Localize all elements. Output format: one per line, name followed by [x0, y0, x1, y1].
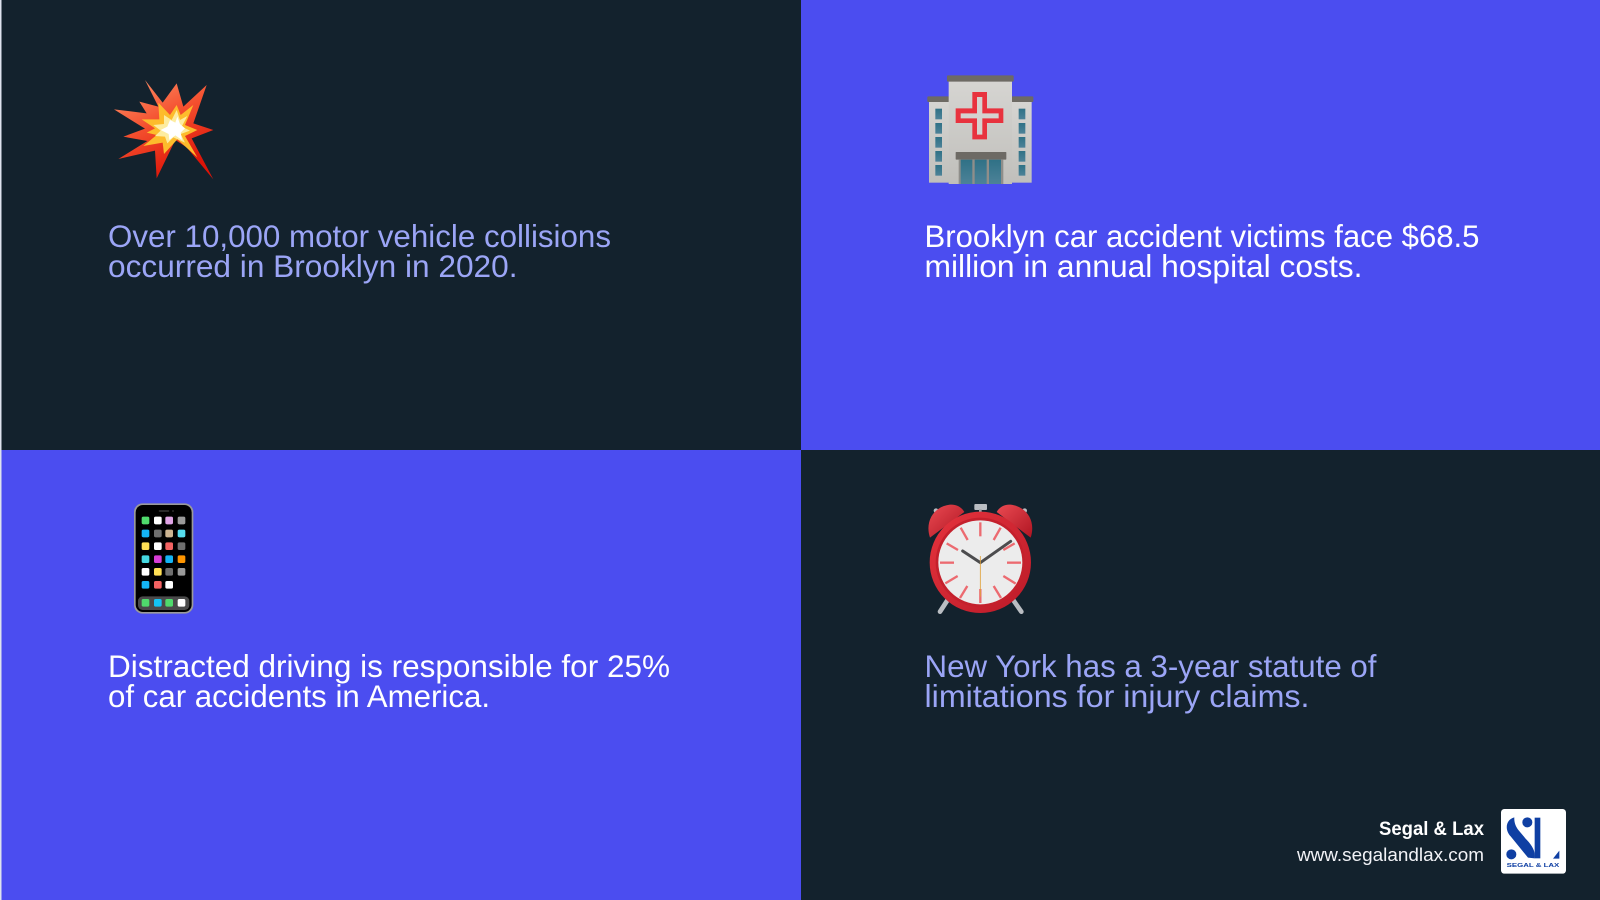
fact text: hospital costs: million in annual hospital costs.: [924, 248, 1362, 284]
fact text: distracted driving: Distracted driving is responsible for 25%: [108, 648, 670, 684]
fact text: statute of limitations: [924, 648, 1377, 714]
fact text: distracted driving: of car accidents in America.: [108, 678, 490, 714]
icon: smartphone: [134, 503, 193, 614]
brand name and website: Segal & Lax: [1379, 819, 1484, 840]
panel: hospital costs: [801, 0, 1600, 450]
icon: collision burst: [114, 80, 213, 179]
icon: alarm clock: [928, 504, 1032, 613]
fact text: statute of limitations: limitations for injury claims.: [924, 678, 1310, 714]
fact text: statute of limitations: New York has a 3-year statute of: [924, 648, 1377, 684]
logo: Segal & Lax: SEGAL & LAX: [1507, 863, 1560, 869]
panel: statute of limitations: [801, 450, 1600, 900]
panel: collisions: [0, 0, 801, 450]
fact text: distracted driving: [108, 648, 670, 714]
fact text: hospital costs: [924, 218, 1480, 284]
fact text: collisions: Over 10,000 motor vehicle collisions: [108, 218, 611, 254]
brand name and website: www.segalandlax.com: [1296, 845, 1484, 865]
icon: hospital: [927, 75, 1033, 184]
logo: Segal & Lax: [1501, 809, 1566, 874]
fact text: hospital costs: Brooklyn car accident victims face $68.5: [924, 218, 1480, 254]
panel: distracted driving: [0, 450, 801, 900]
brand name and website: [1296, 819, 1484, 865]
fact text: collisions: occurred in Brooklyn in 2020.: [108, 248, 518, 284]
fact text: collisions: [108, 218, 611, 284]
